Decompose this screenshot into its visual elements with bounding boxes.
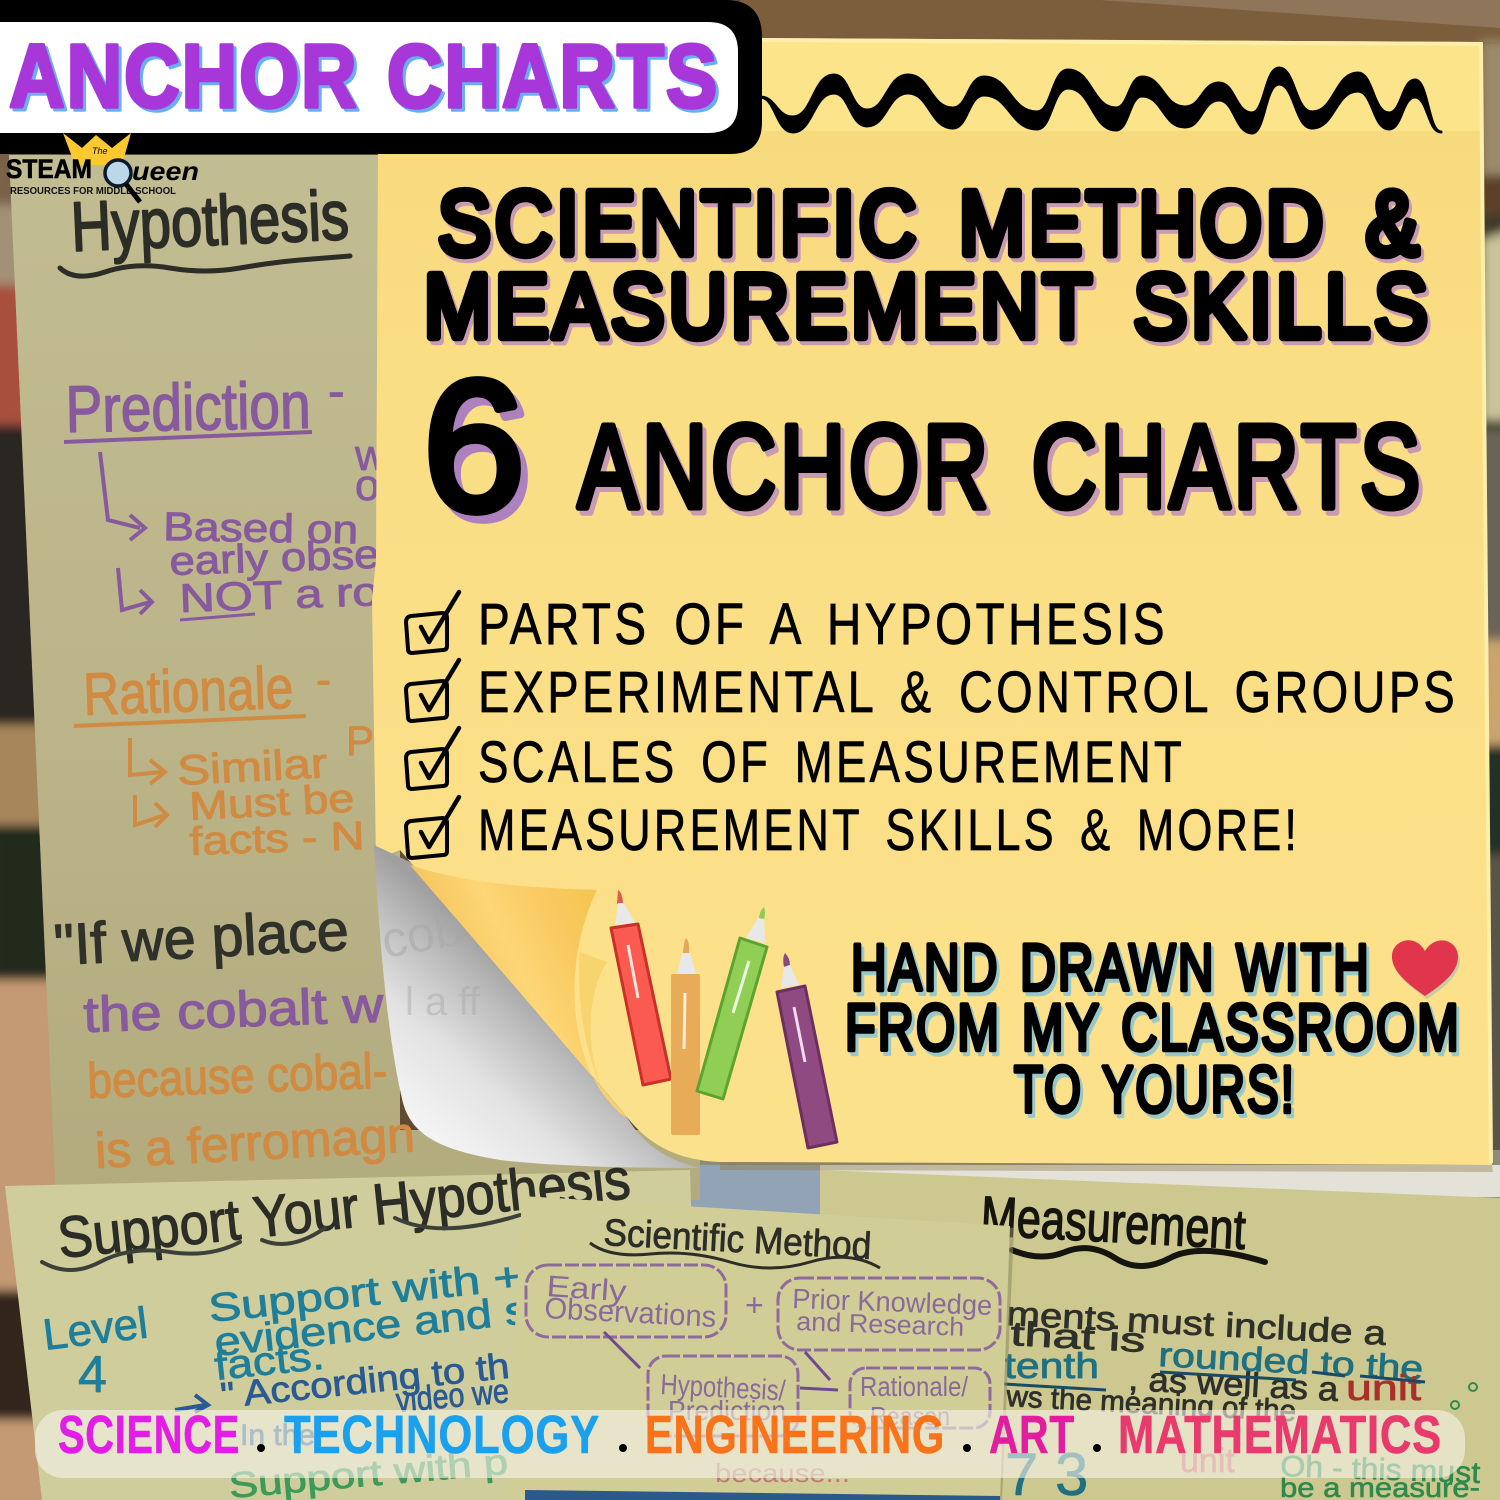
bottom bar: steam words: [35, 1405, 1465, 1478]
chart text: unit callout: Oh - this must: [1280, 1450, 1481, 1490]
logo: the steam queen: ueen: [132, 156, 199, 186]
chart text: prediction: NOT a ro: [179, 570, 380, 621]
chart heading: Hypothesis: [60, 176, 350, 276]
chart text: rationale: P: [346, 717, 374, 764]
icon: markers: [611, 890, 837, 1148]
logo: the steam queen: RESOURCES FOR MIDDLE SCHOOL: [10, 186, 176, 197]
chart diagram: cloud boxes: because...: [715, 1458, 850, 1488]
page curl: grey underside: [374, 845, 700, 1168]
panel: sticky note: [372, 38, 1493, 1172]
chart text: example quote: the cobalt w: [82, 977, 385, 1043]
chart text: unit callout: [1005, 1383, 1481, 1500]
icon: purple marker: [777, 953, 837, 1148]
bottom bar: steam words: ART: [989, 1405, 1075, 1465]
chart text: rationale: facts - N: [189, 814, 365, 864]
chart diagram: cloud boxes: Observations: [544, 1292, 717, 1334]
panel: measurement chart photo: [820, 1170, 1500, 1500]
chart text: prediction: [64, 363, 387, 621]
chart text: measurement rule: [1004, 1295, 1425, 1428]
chart heading: Hypothesis: Hypothesis: [69, 176, 350, 266]
chart diagram: cloud boxes: Prediction: [668, 1395, 786, 1426]
chart text: level 4: video we: [394, 1372, 510, 1420]
chart text: rationale: -: [316, 653, 331, 705]
header banner: [0, 0, 762, 154]
chart text: example quote: because cobal-: [86, 1043, 388, 1109]
bottom bar: steam words: TECHNOLOGY: [284, 1405, 600, 1465]
chart heading: Scientific Method: Scientific Method: [603, 1212, 872, 1268]
chart text: rationale: Rationale: [82, 654, 294, 728]
panel: hypothesis chart photo: [9, 155, 700, 1200]
chart heading: Support Your Hypothesis: Support Your Hypothesis: [55, 1146, 633, 1271]
chart text: level 4: 4: [78, 1346, 107, 1404]
tagline: TO YOURS!: [1014, 1052, 1296, 1126]
chart text: measurement rule: ws the meaning of the: [1005, 1380, 1297, 1428]
checklist: [406, 592, 1458, 863]
chart diagram: cloud boxes: Hypothesis/: [660, 1369, 787, 1408]
logo: the steam queen: [6, 133, 199, 202]
checklist item 3: SCALES OF MEASUREMENT: [478, 730, 1185, 795]
chart text: level 4: Level: [40, 1298, 150, 1360]
chart text: measurement rule: ments must include a: [1006, 1295, 1387, 1353]
page curl: grey underside: cob: [377, 900, 466, 969]
tagline: [845, 930, 1461, 1126]
chart text: prediction: w: [354, 431, 387, 480]
chart diagram: cloud boxes: Rationale/: [860, 1371, 968, 1402]
chart text: rationale: [74, 653, 374, 864]
icon: orange marker: [671, 938, 700, 1135]
chart text: prediction: Prediction: [65, 368, 311, 446]
chart text: measurement rule: unit: [1346, 1367, 1421, 1408]
chart text: measurement rule: , as well as a: [1128, 1360, 1339, 1409]
chart text: example quote: is a ferromagn: [94, 1106, 416, 1179]
chart text: level 4: [40, 1254, 530, 1500]
chart diagram: cloud boxes: +: [745, 1287, 764, 1323]
chart text: level 4: facts.: [212, 1334, 326, 1389]
chart diagram: cloud boxes: Prior Knowledge: [792, 1283, 993, 1321]
icon: heart: [1392, 940, 1458, 996]
chart diagram: cloud boxes: Reason: [870, 1401, 950, 1431]
chart text: prediction: Based on: [163, 505, 359, 552]
logo: the steam queen: The: [92, 146, 108, 156]
icon: red marker: [611, 890, 671, 1085]
chart diagram: cloud boxes: [525, 1265, 1000, 1500]
panel: support your hypothesis chart photo: [5, 1146, 700, 1500]
chart text: level 4: " According to th: [219, 1345, 511, 1416]
page curl: yellow flap: [410, 865, 627, 1117]
bottom bar: steam words: SCIENCE: [58, 1405, 240, 1465]
chart text: unit callout: unit: [1180, 1442, 1235, 1480]
panel: scientific method chart photo: [506, 1196, 1014, 1500]
chart text: measurement rule: tenth: [1004, 1345, 1099, 1386]
chart text: measurement rule: that is: [1010, 1315, 1146, 1360]
chart text: level 4: Support with +: [206, 1254, 524, 1331]
title: anchor charts: ANCHOR CHARTS: [9, 27, 719, 127]
chart diagram: cloud boxes: and Research: [796, 1306, 965, 1342]
chart text: level 4: In the: [240, 1419, 315, 1452]
chart text: measurement rule: rounded to the: [1158, 1336, 1424, 1388]
chart heading: Measurement: Measurement: [979, 1184, 1248, 1261]
checklist item 1: PARTS OF A HYPOTHESIS: [478, 592, 1168, 657]
chart diagram: cloud boxes: Early: [546, 1270, 628, 1309]
chart text: prediction: o: [355, 461, 379, 510]
big number 6: 6: [423, 343, 525, 550]
page curl: grey underside: l a ff: [405, 980, 481, 1024]
logo: the steam queen: STEAM: [6, 154, 92, 184]
chart text: example quote: "If we place: [52, 898, 350, 978]
wavy line decoration: [760, 68, 1441, 133]
main heading: scientific method and measurement skills: [424, 174, 1432, 357]
chart text: rationale: Must be: [188, 776, 355, 829]
icon: green marker: [697, 907, 767, 1099]
bottom bar: steam words: ENGINEERING: [645, 1405, 945, 1465]
chart text: rationale: Similar: [176, 739, 328, 794]
chart text: level 4: evidence and s: [212, 1288, 530, 1365]
chart text: prediction: early obse: [169, 533, 380, 584]
chart text: prediction: -: [328, 363, 345, 419]
chart text: example quote: [52, 898, 416, 1179]
